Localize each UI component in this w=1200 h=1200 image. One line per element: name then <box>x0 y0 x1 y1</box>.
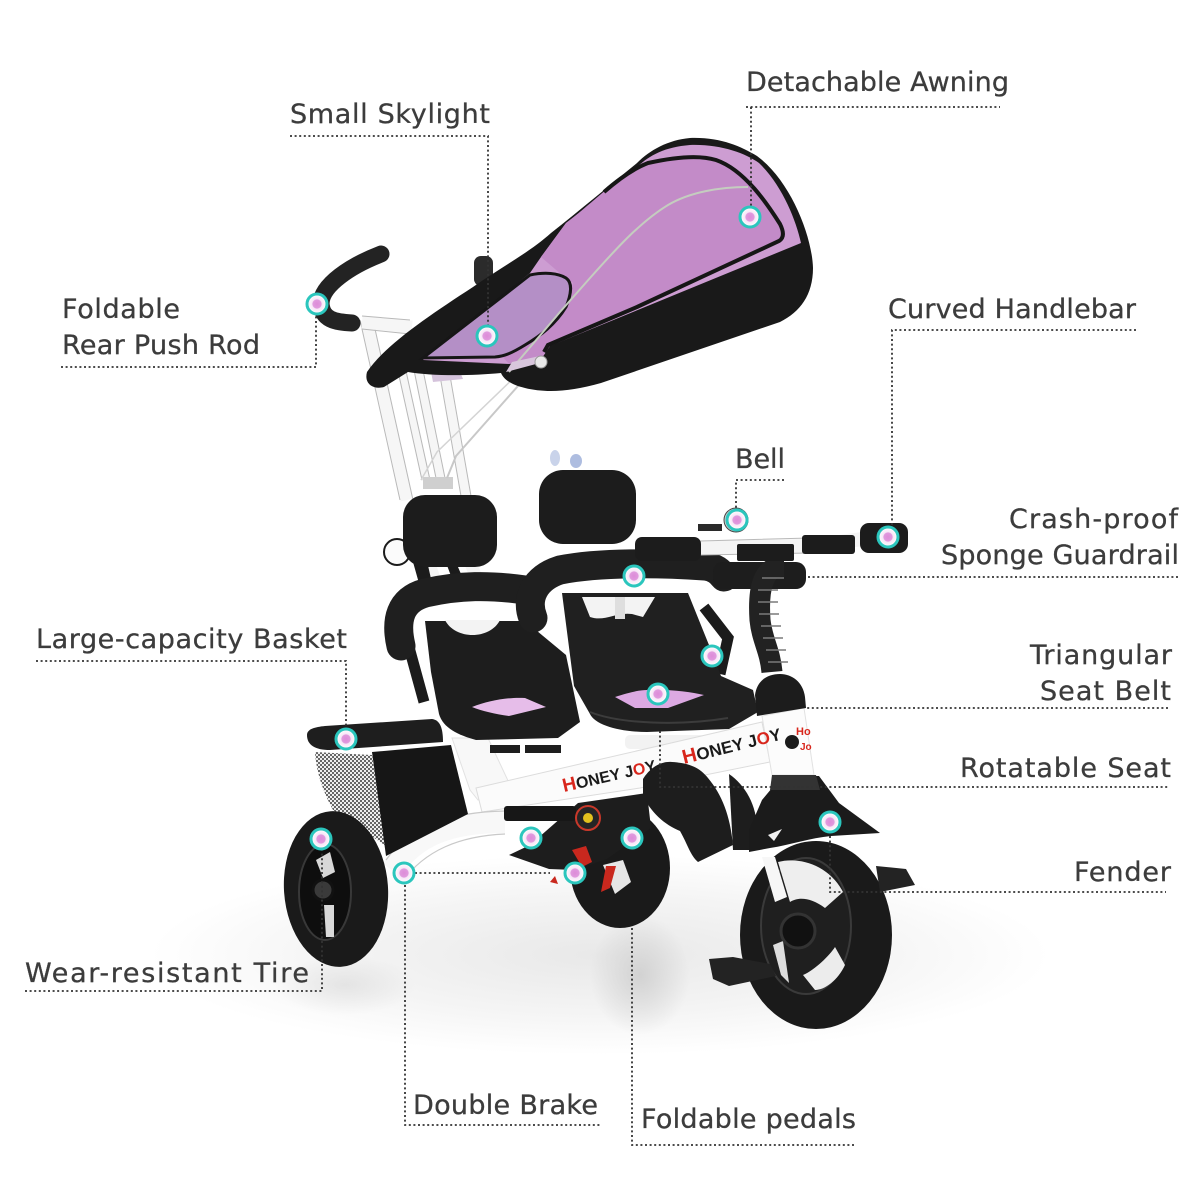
rear strap <box>407 640 424 702</box>
head tube <box>762 708 814 775</box>
trike illustration <box>279 138 915 1029</box>
label: Small Skylight: Small Skylight <box>290 99 490 130</box>
label: Triangular Seat Belt: Triangular <box>1029 640 1173 671</box>
awning <box>366 138 813 391</box>
left wheel <box>279 808 393 970</box>
upright <box>452 738 510 800</box>
label: Crash-proof Sponge Guardrail: Crash-proof <box>1009 504 1179 535</box>
label: Fender: Fender <box>1074 857 1172 888</box>
markers <box>307 207 898 883</box>
rear seat <box>425 621 580 740</box>
ground shadow <box>150 855 1050 1055</box>
guardrail <box>399 564 724 646</box>
label: Foldable Rear Push Rod: Rear Push Rod <box>62 330 260 361</box>
label: Bell: Bell <box>735 444 785 475</box>
label: Wear-resistant Tire: Wear-resistant Tire <box>25 958 309 989</box>
frame <box>386 708 814 882</box>
label: Large-capacity Basket: Large-capacity Basket <box>36 624 347 655</box>
frame: Ho <box>796 726 811 738</box>
fender and foot pedals <box>709 775 915 986</box>
collar <box>755 674 806 716</box>
label: Triangular Seat Belt <box>1029 640 1173 707</box>
fork <box>762 857 787 902</box>
bell <box>724 508 748 532</box>
label: Foldable pedals: Foldable pedals <box>641 1104 856 1135</box>
skylight <box>423 273 571 358</box>
rear push rod frame <box>321 254 541 500</box>
handlebar <box>635 508 908 716</box>
purple canopy <box>423 145 801 364</box>
front wheel <box>740 841 892 1029</box>
label: Foldable Rear Push Rod <box>62 294 260 361</box>
label: Detachable Awning: Detachable Awning <box>746 67 1009 98</box>
frame: HONEY JOY <box>680 723 784 769</box>
headrests and rear posts <box>384 450 636 594</box>
label: Foldable Rear Push Rod: Foldable <box>62 294 180 325</box>
front seat <box>562 593 758 732</box>
label: Crash-proof Sponge Guardrail <box>941 504 1179 571</box>
frame: HONEY JOY <box>560 755 658 797</box>
frame: Jo <box>800 742 812 753</box>
handle grip <box>321 254 381 323</box>
pedals and brake <box>504 793 651 892</box>
rear curved <box>392 822 505 870</box>
label: Rotatable Seat: Rotatable Seat <box>960 753 1171 784</box>
hose <box>760 566 784 672</box>
front strap <box>704 607 728 674</box>
label: Crash-proof Sponge Guardrail: Sponge Guardrail <box>941 540 1179 571</box>
seats <box>407 593 758 740</box>
seat support fender <box>643 762 757 862</box>
grips <box>635 537 701 561</box>
label: Triangular Seat Belt: Seat Belt <box>1040 676 1171 707</box>
middle wheel <box>570 808 670 928</box>
basket <box>307 719 468 856</box>
label: Curved Handlebar: Curved Handlebar <box>888 294 1137 325</box>
label: Double Brake: Double Brake <box>413 1090 598 1121</box>
main bar <box>476 722 770 812</box>
